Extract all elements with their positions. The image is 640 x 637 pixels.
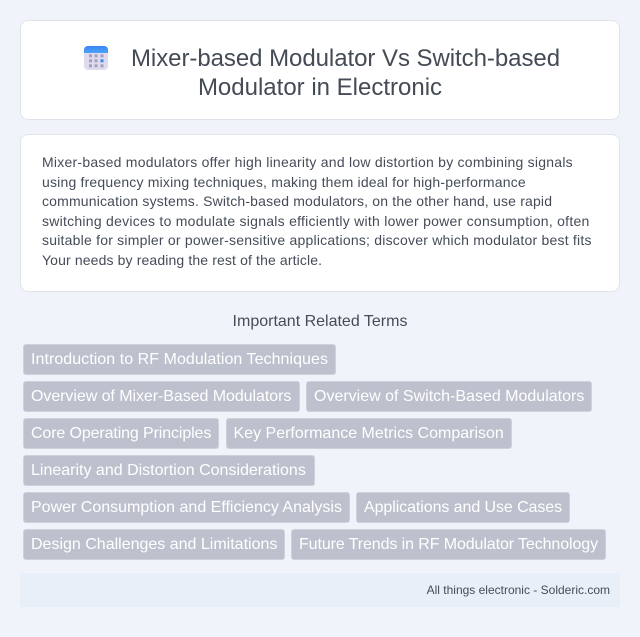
title bbox=[131, 45, 560, 101]
footer text: All things electronic - Solderic.com bbox=[427, 583, 610, 597]
tag bbox=[356, 492, 570, 523]
tag: Overview of Mixer-Based Modulators bbox=[31, 388, 291, 405]
tag: Overview of Switch-Based Modulators bbox=[314, 388, 584, 405]
tag bbox=[226, 418, 512, 449]
tag: Applications and Use Cases bbox=[364, 499, 562, 516]
tag bbox=[23, 418, 218, 449]
tag: Design Challenges and Limitations bbox=[31, 536, 277, 553]
description text: using frequency mixing techniques, making them ideal for high-performance bbox=[42, 174, 526, 190]
description text: suitable for simpler or power-sensitive applications; discover which modulator best fits bbox=[42, 232, 592, 248]
title card bbox=[20, 20, 620, 120]
description text: Mixer-based modulators offer high linearity and low distortion by combining signals bbox=[42, 154, 573, 170]
description card bbox=[20, 134, 620, 292]
tag: Linearity and Distortion Considerations bbox=[31, 462, 306, 479]
tag: Core Operating Principles bbox=[31, 425, 211, 442]
title: Modulator in Electronic bbox=[198, 74, 442, 101]
tag bbox=[291, 529, 606, 560]
footer bar bbox=[20, 573, 620, 607]
tags bbox=[23, 344, 606, 560]
tag: Power Consumption and Efficiency Analysis bbox=[31, 499, 342, 516]
tag: Key Performance Metrics Comparison bbox=[234, 425, 504, 442]
icon: calendar bbox=[84, 46, 108, 70]
tag bbox=[23, 344, 336, 375]
tag bbox=[23, 492, 350, 523]
tag: Introduction to RF Modulation Techniques bbox=[31, 351, 328, 368]
tag bbox=[23, 455, 315, 486]
tag bbox=[23, 529, 285, 560]
description text: switching devices to modulate signals efficiently with lower power consumption, often bbox=[42, 213, 590, 229]
description text: communication systems. Switch-based modulators, on the other hand, use rapid bbox=[42, 193, 552, 209]
tag bbox=[23, 381, 300, 412]
tag: Future Trends in RF Modulator Technology bbox=[299, 536, 598, 553]
description text: Your needs by reading the rest of the article. bbox=[42, 252, 322, 268]
description text bbox=[42, 154, 592, 268]
related terms heading: Important Related Terms bbox=[233, 313, 407, 330]
tag bbox=[306, 381, 592, 412]
title: Mixer-based Modulator Vs Switch-based bbox=[131, 45, 560, 72]
